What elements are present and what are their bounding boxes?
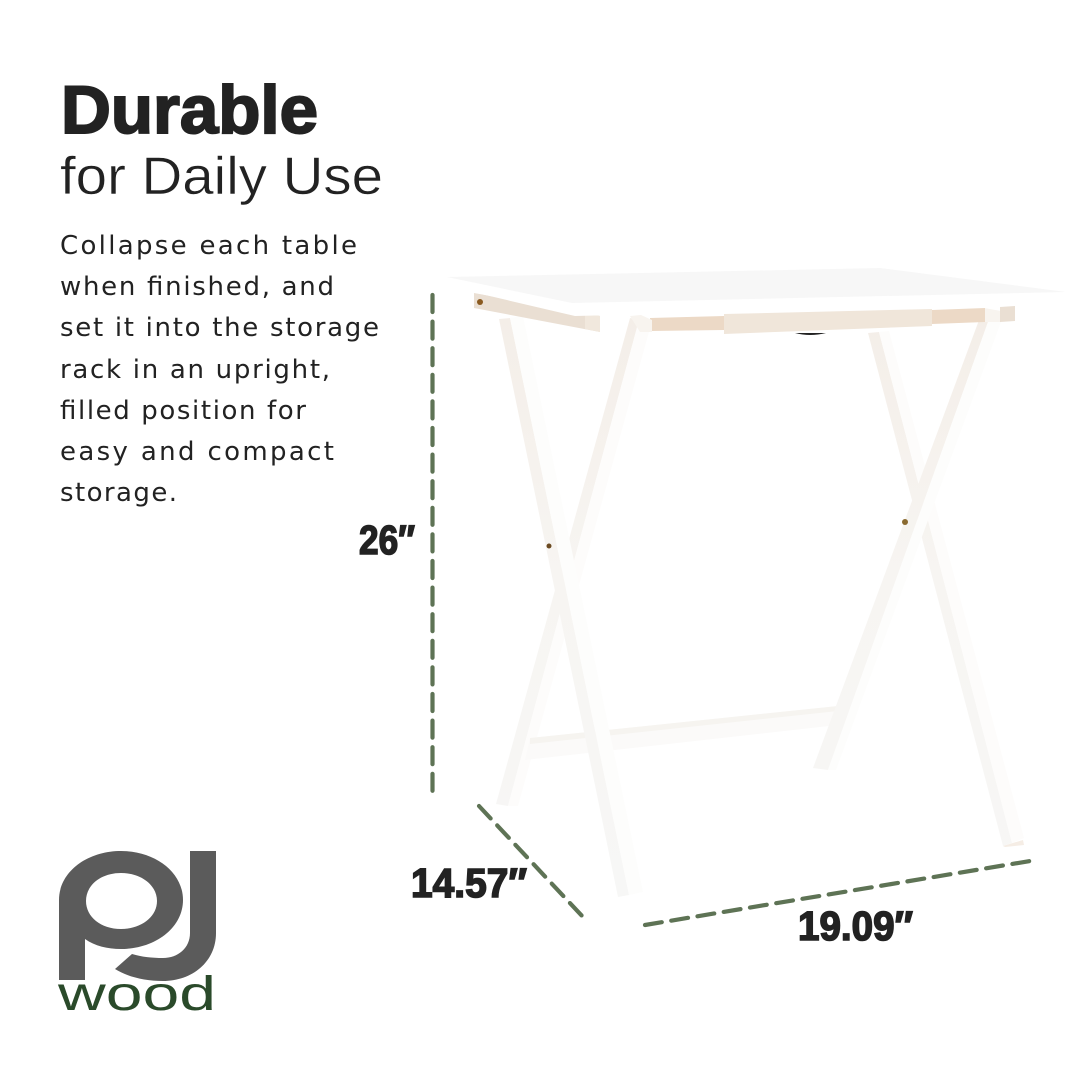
height dimension line: [430, 295, 435, 793]
logo wordmark: wood: [57, 968, 216, 1021]
title: for Daily Use: [60, 147, 383, 206]
table front right leg: [813, 308, 1001, 770]
logo letter p: [59, 851, 183, 980]
depth dimension line: [479, 806, 583, 917]
title: Durable: [61, 72, 318, 148]
description text: [60, 231, 379, 508]
description text: when finished, and: [60, 272, 334, 302]
description text: filled position for: [60, 396, 306, 426]
table back left leg: [496, 318, 652, 806]
table illustration: [447, 268, 1066, 897]
table front left leg: [499, 316, 643, 897]
title: [60, 72, 383, 206]
description text: Collapse each table: [60, 231, 357, 261]
description text: easy and compact: [60, 437, 334, 467]
description text: set it into the storage: [60, 313, 379, 343]
crossbar: [525, 706, 838, 760]
logo: pj wood: [57, 851, 216, 1021]
wooden rails: [474, 293, 1015, 335]
depth label: 14.57″: [411, 860, 527, 906]
width dimension line: [645, 861, 1030, 925]
width label: 19.09″: [798, 903, 913, 949]
description text: storage.: [60, 478, 177, 508]
table top: [447, 268, 1066, 316]
logo letter j: [115, 851, 216, 981]
table back right leg: [868, 331, 1024, 847]
height label: 26″: [359, 517, 415, 563]
description text: rack in an upright,: [60, 355, 330, 385]
